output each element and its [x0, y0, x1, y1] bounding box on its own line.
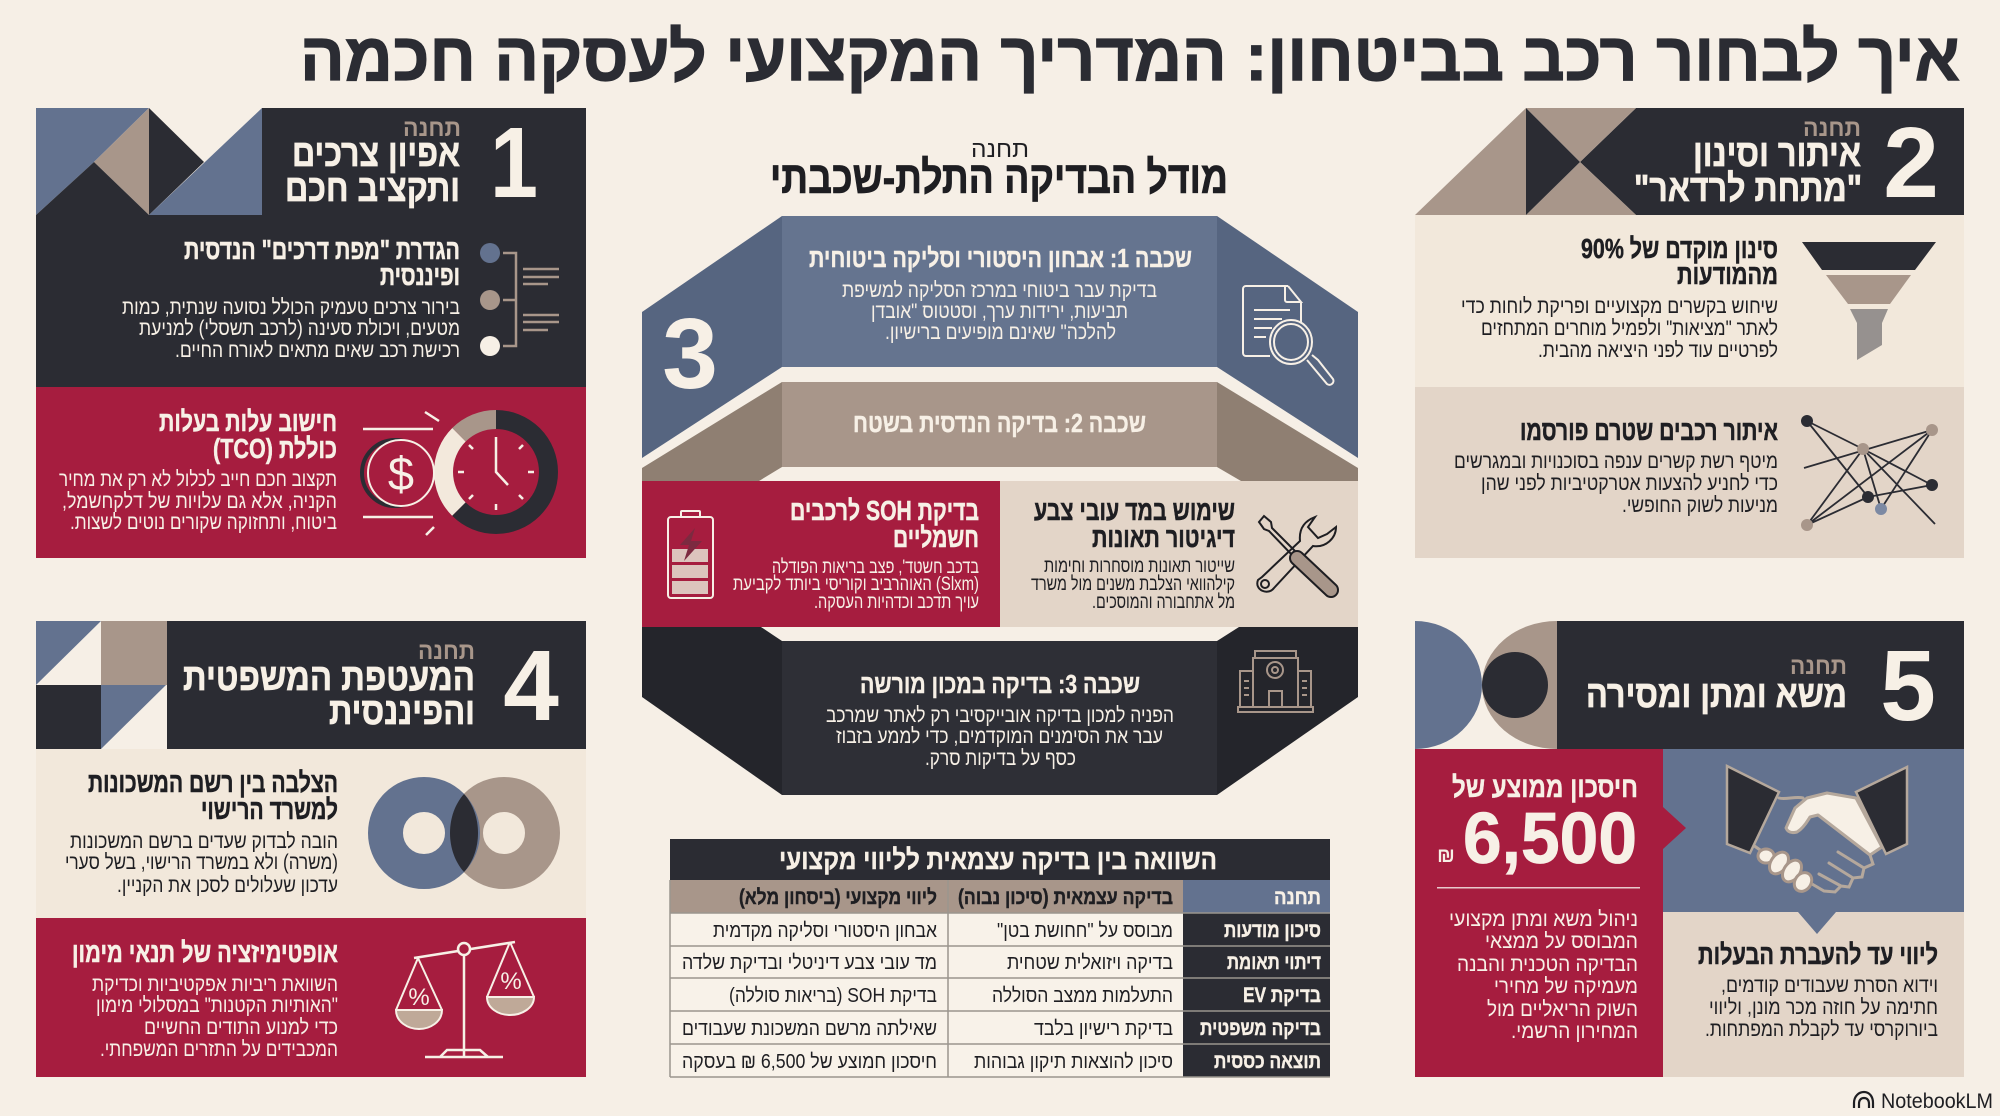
- total cost text: חישוב עלות בעלות: [159, 406, 337, 437]
- station 4 header: [36, 621, 586, 749]
- icon: certified garage: [1238, 651, 1313, 712]
- geometric art: [36, 621, 167, 749]
- total cost text: [59, 406, 337, 534]
- layer 1: [642, 216, 1358, 458]
- callout notch: [1798, 912, 1836, 934]
- savings label: חיסכון ממוצע של: [1452, 772, 1638, 804]
- paint gauge text: שייטור תאונות מוסחרות וחימות: [1044, 556, 1235, 577]
- early filter text: [1461, 233, 1778, 362]
- geometric art: [1415, 108, 1636, 215]
- layer 3 text: כסף על בדיקות סרק.: [925, 747, 1076, 770]
- station title: משא ומתן ומסירה: [1586, 674, 1847, 716]
- savings text: הבדיקה הטכנית והבנה: [1457, 953, 1638, 976]
- card: roadmap: [36, 215, 586, 387]
- roadmap text: הגדרת "מפת דרכים" הנדסית: [184, 234, 460, 265]
- icon: balance scale: %: [408, 984, 430, 1011]
- unlisted cars text: כדי לחניע להצעות אטרקטיביות לפני שהן: [1481, 472, 1778, 495]
- icon: battery: [668, 511, 713, 598]
- table header row: בדיקה עצמאית (סיכון נבוה): [958, 886, 1173, 909]
- table row labels: סיכון מודעות: [1224, 919, 1321, 942]
- layer 3 text: הפניה למכון בדיקה אובייקסיבי רק לאתר שמרכב: [826, 704, 1174, 727]
- icon: balance scale: [396, 942, 534, 1057]
- table column: self inspection: [974, 920, 1173, 1073]
- layer 2 label: שכבה 2: בדיקה הנדסית בשטח: [853, 408, 1146, 438]
- panel: station 4: [36, 621, 586, 1077]
- shekel sign: ₪: [1437, 845, 1455, 867]
- roadmap text: בירור צרכים טעמיק הכולל נסועה שנתית, כמות: [122, 296, 460, 319]
- early filter text: מהמודעות: [1677, 259, 1778, 290]
- total cost text: תקצוב חכם חייב לכלול לא רק את מחיר: [59, 468, 337, 491]
- savings text: מעמיקה של מחירי: [1494, 975, 1638, 998]
- registry text: עדכון שעלולים לסכן את הקניין.: [117, 874, 338, 897]
- table column: professional escort: בדיקת SOH (בריאות סוללה): [729, 985, 937, 1007]
- geometric art: [1415, 621, 1557, 749]
- savings number: 6,500: [1463, 799, 1637, 879]
- registry text: [65, 767, 338, 897]
- card: unlisted cars: [1415, 387, 1964, 558]
- station label: תחנה: [1803, 115, 1861, 142]
- geometric art: [36, 108, 262, 215]
- icon: overlapping rings: [386, 794, 542, 872]
- icon: coin and clock: [362, 412, 548, 535]
- table column: self inspection: בדיקת רישיון בלבד: [1034, 1018, 1173, 1040]
- roadmap text: מטעים, ויכולת סעינה (לרכב תשסלי) למניעת: [139, 317, 460, 340]
- SOH text: חשמליים: [893, 522, 979, 553]
- delivery text: ביורוקרסי עד לקבלת המפתחות.: [1705, 1018, 1938, 1041]
- layer 2: [642, 382, 1358, 481]
- financing text: השוואת ריביות אפקטיביות וכדיקת: [92, 973, 338, 996]
- delivery text: וידוא הסרת שעבודים קודמים,: [1721, 974, 1938, 997]
- table column: professional escort: אבחון היסטורי וסליקה מקדמית: [713, 920, 937, 942]
- layer 1 text: להלכה" שאינם מופיעים ברישיון.: [885, 321, 1116, 344]
- station number: 1: [490, 107, 538, 219]
- registry text: (משרה) ולא במשרד הרישוי, בשל סערי: [65, 851, 338, 874]
- paint gauge text: [1031, 495, 1235, 613]
- panel: station 3: [642, 136, 1358, 1077]
- paint gauge text: קילהוואי הצלבת משנים מול משרד: [1031, 574, 1235, 595]
- financing text: [72, 937, 338, 1061]
- layer 3 text: עבר את הסימנים המוקדמים, כדי לממע בזבוז: [836, 725, 1163, 748]
- paint gauge text: דיגיטור תאונות: [1092, 522, 1235, 553]
- registry text: למשרד הרישוי: [201, 794, 338, 825]
- layer 1 text: תביעות, ירידות ערך, וסטטוס "אובדן: [871, 300, 1128, 323]
- layer 3 text: שכבה 3: בדיקה במכון מורשה: [860, 669, 1140, 699]
- table header row: ליווי מקצועי (ביסחון מלא): [739, 886, 937, 909]
- station title: [183, 657, 475, 733]
- icon: coin and clock: $: [388, 447, 414, 500]
- icon: roadmap nodes: [480, 243, 559, 356]
- card: registry cross-check: [36, 749, 586, 918]
- savings text: השוק הריאליים מול: [1487, 998, 1638, 1021]
- comparison table: [670, 839, 1330, 1077]
- card: delivery: [1663, 912, 1964, 1077]
- savings text: ניהול משא ומתן מקצועי: [1449, 908, 1638, 931]
- table row labels: בדיקה משפטית: [1200, 1017, 1321, 1040]
- NotebookLM logo: [1854, 1090, 1993, 1113]
- SOH text: (Slxm) האוהרביב וקוריסי ביותד לקביעת: [733, 574, 979, 595]
- table row labels: דיתוי תאומת: [1227, 951, 1321, 974]
- station title: [1634, 133, 1862, 210]
- card: financing: [36, 918, 586, 1077]
- layer 1 text: שכבה 1: אבחון היסטורי וסליקה ביטוחית: [809, 243, 1192, 273]
- panel: station 2: [1415, 107, 1964, 558]
- icon: handshake: [1727, 766, 1907, 895]
- panel: station 5: [1415, 621, 1964, 1077]
- savings text: [1449, 908, 1638, 1043]
- station 5 header: [1415, 621, 1964, 749]
- unlisted cars text: מיטף רשת קשרים ענפה בסוכנויות ובמגרשים: [1454, 450, 1778, 473]
- financing text: המכבידים על התזרים המשפחתי.: [100, 1038, 338, 1061]
- layer 3 text: [826, 669, 1174, 770]
- early filter text: לאתר "מציאות" ולפמיל מוחרים המתחזים: [1481, 317, 1778, 340]
- icon: balance scale: %: [500, 968, 522, 995]
- paint gauge text: מל אתחבורה והמוסכים.: [1092, 592, 1235, 613]
- station number: 5: [1880, 630, 1936, 742]
- station title: "מתחת לרדאר": [1634, 168, 1862, 210]
- station 2 header: [1415, 107, 1964, 219]
- card: handshake visual: [1663, 749, 1964, 912]
- unlisted cars text: [1454, 415, 1778, 517]
- delivery text: [1698, 939, 1938, 1041]
- station label: תחנה: [1790, 653, 1847, 680]
- table column: self inspection: בדיקה ויזואלית שטחית: [1007, 952, 1173, 974]
- paint gauge text: שימוש במד עובי צבע: [1034, 495, 1235, 526]
- logo wordmark: NotebookLM: [1881, 1090, 1993, 1113]
- financing text: אופטימיזציה של תנאי מימון: [72, 937, 338, 968]
- SOH text: בדיקת SOH לרכבים: [790, 495, 979, 526]
- table header row: תחנה: [1274, 886, 1321, 909]
- card: SOH test: [642, 481, 1000, 627]
- early filter text: סינון מוקדם של 90%: [1581, 233, 1778, 264]
- layer 1 text: בדיקת עבר ביטוחי במרכז הסליקה למשיפת: [842, 279, 1157, 302]
- station title: והפיננסית: [329, 691, 475, 733]
- financing text: כדי למנוע התודים החשיים: [144, 1016, 338, 1039]
- financing text: "האותיות הקטנות" במסלולי מימון: [96, 994, 338, 1017]
- delivery text: ליווי עד להעברת הבעלות: [1698, 939, 1938, 970]
- layer 3: [642, 627, 1358, 795]
- icon: document with magnifier: [1243, 286, 1333, 385]
- icon: funnel: [1802, 242, 1936, 360]
- card: savings: [1415, 749, 1686, 1077]
- roadmap text: ופיננסית: [380, 260, 460, 291]
- layer 1 text: [809, 243, 1192, 344]
- total cost text: הקניה, אלא גם עלויות של דלקחשמל,: [62, 490, 337, 513]
- table column: self inspection: התעלמות ממצב הסוללה: [992, 985, 1173, 1007]
- savings text: המבוסס על ממצאי: [1485, 930, 1638, 953]
- icon: wrench and screwdriver: [1257, 516, 1336, 592]
- registry text: הובה לבדוק שעדים ברשם המשכונות: [70, 830, 338, 853]
- station 3 heading: תחנה: [971, 136, 1029, 162]
- table header row: [670, 880, 1330, 913]
- card: early filter: [1415, 215, 1964, 387]
- SOH text: בדכב חשטד', פצב בריאות הפודלה: [772, 557, 979, 578]
- station number: 2: [1883, 107, 1939, 219]
- station 1 header: [36, 107, 586, 219]
- table column: self inspection: סיכון להוצאות תיקון גבוהות: [974, 1051, 1173, 1073]
- roadmap text: רכישת רכב שאים מתאים לאורח החיים.: [175, 339, 460, 362]
- station label: תחנה: [403, 115, 461, 142]
- SOH text: [733, 495, 979, 613]
- table body grid: [670, 880, 1330, 1077]
- station title: [285, 133, 460, 210]
- table row labels: [1200, 919, 1321, 1073]
- savings text: המחירון הרשמי.: [1511, 1020, 1638, 1043]
- total cost text: ביטוח, ותחזוקה שקורים נוטים לשצות.: [70, 511, 337, 534]
- table column: professional escort: שאילתה מרשם המשכונת שעבודים: [682, 1018, 937, 1040]
- card: total cost: [36, 387, 586, 558]
- table column: professional escort: [682, 920, 937, 1073]
- unlisted cars text: איתור רכבים שטרם פורסמו: [1520, 415, 1778, 446]
- table column: professional escort: מד עובי צבע דיניטלי ובדיקת שלדה: [682, 952, 937, 974]
- table row labels: תוצאה כססית: [1214, 1050, 1321, 1073]
- table title: השוואה בין בדיקה עצמאית לליווי מקצועי: [779, 844, 1217, 875]
- station title: אפיון צרכים: [292, 133, 460, 175]
- table row labels: בדיקת EV: [1243, 984, 1321, 1007]
- early filter text: לפרטיים עוד לפני היציאה מהבית.: [1538, 339, 1778, 362]
- station title: איתור וסינון: [1693, 133, 1861, 175]
- table column: self inspection: מבוסס על "חחושת בטן": [997, 920, 1173, 942]
- unlisted cars text: מניעות לשוק החופשי.: [1622, 494, 1778, 517]
- savings divider: [1437, 887, 1640, 888]
- total cost text: כוללת (TCO): [213, 433, 337, 464]
- station label: תחנה: [418, 638, 475, 665]
- card: paint gauge: [1000, 481, 1358, 627]
- station title: המעטפת המשפטית: [183, 657, 475, 699]
- icon: NotebookLM mark: [1854, 1092, 1873, 1108]
- table column: professional escort: חיסכון חמוצע של 6,500 ₪ בעסקה: [682, 1051, 937, 1073]
- panel: station 1: [36, 107, 586, 558]
- station 3 heading: [770, 136, 1228, 203]
- station number: 3: [662, 298, 718, 410]
- roadmap text: [122, 234, 460, 362]
- title: איך לבחור רכב בביטחון: המדריך המקצועי לעסקה חכמה: [300, 19, 1960, 95]
- early filter text: שיחוש בקשרים מקצועיים ופריקת לוחות כדי: [1461, 295, 1778, 318]
- station number: 4: [503, 630, 559, 742]
- registry text: הצלבה בין רשם המשכונות: [88, 767, 338, 798]
- station 3 heading: מודל הבדיקה התלת-שכבתי: [770, 152, 1228, 203]
- SOH text: עויך תדכב וכדהיות העסקה.: [814, 592, 979, 613]
- icon: network: [1801, 415, 1938, 531]
- station title: ותקציב חכם: [285, 168, 460, 210]
- delivery text: חתימה על חוזה מכר מונן, וליווי: [1709, 996, 1938, 1019]
